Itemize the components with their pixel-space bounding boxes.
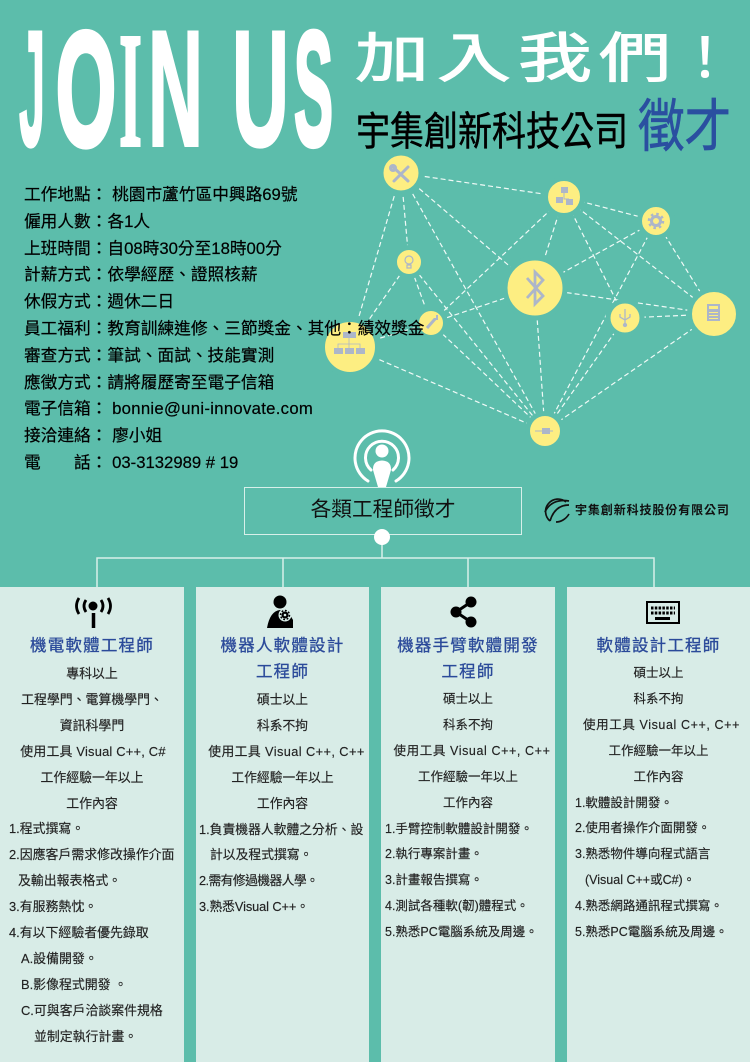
network diagram xyxy=(325,156,736,446)
heading box: all engineer roles: 各類工程師徵才 xyxy=(311,498,455,521)
card details: 工作經驗一年以上 xyxy=(418,770,518,784)
card details: 使用工具 Visual C++, C++ xyxy=(208,744,365,759)
icon: share xyxy=(450,596,476,628)
card details: 1.軟體設計開發。 xyxy=(575,796,673,810)
title: JOIN US: O xyxy=(56,0,116,180)
company logo and name xyxy=(544,498,730,523)
heading: 加入我們！: 我 xyxy=(518,29,592,89)
card details: 並制定執行計畫。 xyxy=(34,1029,137,1044)
card details: A.設備開發。 xyxy=(21,951,98,966)
subheading: recruiting: 徵才 xyxy=(638,95,731,159)
card details xyxy=(575,666,740,939)
card details: 使用工具 Visual C++, C++ xyxy=(583,718,740,732)
title: JOIN US: N xyxy=(148,0,203,180)
card details: 工作內容 xyxy=(633,770,684,784)
card details: 4.熟悉網路通訊程式撰寫。 xyxy=(575,899,723,913)
card details: 2.需有修過機器人學。 xyxy=(199,873,318,888)
job details list: 工作地點： 桃園市蘆竹區中興路69號 僱用人數：各1人 上班時間：自08時30分至18時00分 計薪方式：依學經歷、證照核薪 休假方式：週休二日 員工福利：教育訓練進修、三節獎金、其他：績效獎金 審查方式：筆試、面試、技能實測 應徵方式：請將履歷寄至電子信箱 電子信箱： bonnie@uni-innovate.com 接洽連絡： 廖小姐 電 話： 03-3132989 # 19 xyxy=(24,185,424,472)
card details: 科系不拘 xyxy=(257,718,308,733)
card details: 計以及程式撰寫。 xyxy=(210,847,312,862)
card details: 科系不拘 xyxy=(633,692,684,706)
icon: calculator xyxy=(707,304,720,321)
card details: 資訊科學門 xyxy=(60,718,124,733)
card details: 1.負責機器人軟體之分析、設 xyxy=(199,822,363,837)
card title: 工程師 xyxy=(441,663,495,681)
heading: 加入我們！: 們 xyxy=(599,29,671,89)
panel: mechatronics software engineer xyxy=(0,587,184,1062)
panel: software design engineer xyxy=(567,587,750,1062)
card title: 機器手臂軟體開發 xyxy=(397,637,539,655)
panel: robot arm software engineer xyxy=(381,587,555,1062)
card details: 科系不拘 xyxy=(443,718,493,732)
card details: 工程學門、電算機學門、 xyxy=(21,692,163,707)
icon: wrench xyxy=(427,315,437,328)
card details: C.可與客戶洽談案件規格 xyxy=(21,1003,163,1018)
card details: 5.熟悉PC電腦系統及周邊。 xyxy=(385,925,538,939)
icon: podcast person xyxy=(354,429,410,487)
icon: person with gear xyxy=(267,596,293,628)
card details: 工作內容 xyxy=(443,796,493,810)
card details: B.影像程式開發 。 xyxy=(21,977,127,992)
icon: org chart xyxy=(334,332,365,354)
icon: bulb xyxy=(405,256,413,268)
card details: 3.計畫報告撰寫。 xyxy=(385,873,483,887)
title: JOIN US: I xyxy=(119,0,142,182)
card details: 5.熟悉PC電腦系統及周邊。 xyxy=(575,925,728,939)
heading: 加入我們！ xyxy=(355,29,733,89)
card title xyxy=(397,636,539,681)
card details: 工作內容 xyxy=(257,796,308,811)
card details xyxy=(9,666,174,1044)
card details: 專科以上 xyxy=(66,666,118,681)
org chart connector xyxy=(96,529,655,587)
title: JOIN US: S xyxy=(294,0,333,180)
subheading: company name: 宇集創新科技公司 xyxy=(356,110,628,154)
card details: 4.測試各種軟(韌)體程式。 xyxy=(385,899,529,913)
heading: 加入我們！: ！ xyxy=(677,29,733,89)
card details: 工作經驗一年以上 xyxy=(608,744,708,758)
card details: 1.程式撰寫。 xyxy=(9,821,84,836)
card details: 1.手臂控制軟體設計開發。 xyxy=(385,822,533,836)
card details: 4.有以下經驗者優先錄取 xyxy=(9,925,149,940)
title: JOIN US: U xyxy=(232,0,289,180)
icon: tools xyxy=(390,166,408,181)
card details: 2.因應客戶需求修改操作介面 xyxy=(9,847,174,862)
icon: usb xyxy=(620,309,630,326)
card title: 軟體設計工程師 xyxy=(597,637,720,655)
card details: 碩士以上 xyxy=(257,692,308,707)
icon: network xyxy=(556,187,573,205)
card details: 工作內容 xyxy=(66,796,118,811)
company logo and name: 宇集創新科技股份有限公司 xyxy=(575,503,730,517)
card details: 工作經驗一年以上 xyxy=(40,770,144,785)
card details: 及輸出報表格式。 xyxy=(18,873,121,888)
heading: 加入我們！: 入 xyxy=(437,29,511,89)
card title xyxy=(220,636,344,681)
icon: bluetooth xyxy=(527,272,543,304)
heading: 加入我們！: 加 xyxy=(355,29,429,89)
title: JOIN US xyxy=(19,0,333,182)
card details: 3.熟悉物件導向程式語言 xyxy=(575,847,710,861)
card title: 機器人軟體設計 xyxy=(221,637,344,655)
card details: 3.有服務熱忱。 xyxy=(9,899,97,914)
card details: 碩士以上 xyxy=(633,666,684,680)
card details: 2.使用者操作介面開發。 xyxy=(575,821,710,835)
card details: 3.熟悉Visual C++。 xyxy=(199,899,309,914)
panel: robot software design engineer xyxy=(196,587,369,1062)
card details: 2.執行專案計畫。 xyxy=(385,847,483,861)
card details: 使用工具 Visual C++, C# xyxy=(20,744,166,759)
heading box: all engineer roles xyxy=(244,487,522,535)
card title: 機電軟體工程師 xyxy=(30,637,154,655)
card details xyxy=(199,692,365,914)
icon: keyboard xyxy=(646,601,680,624)
card details: (Visual C++或C#)。 xyxy=(585,873,695,887)
card details: 碩士以上 xyxy=(443,692,493,706)
card title: 工程師 xyxy=(256,663,309,681)
card details: 工作經驗一年以上 xyxy=(231,770,334,785)
icon: plug xyxy=(535,428,553,434)
card details: 使用工具 Visual C++, C++ xyxy=(394,744,550,758)
card details xyxy=(385,692,550,939)
icon: antenna xyxy=(75,597,112,628)
icon: gear xyxy=(649,214,663,228)
title: JOIN US: J xyxy=(19,0,45,180)
